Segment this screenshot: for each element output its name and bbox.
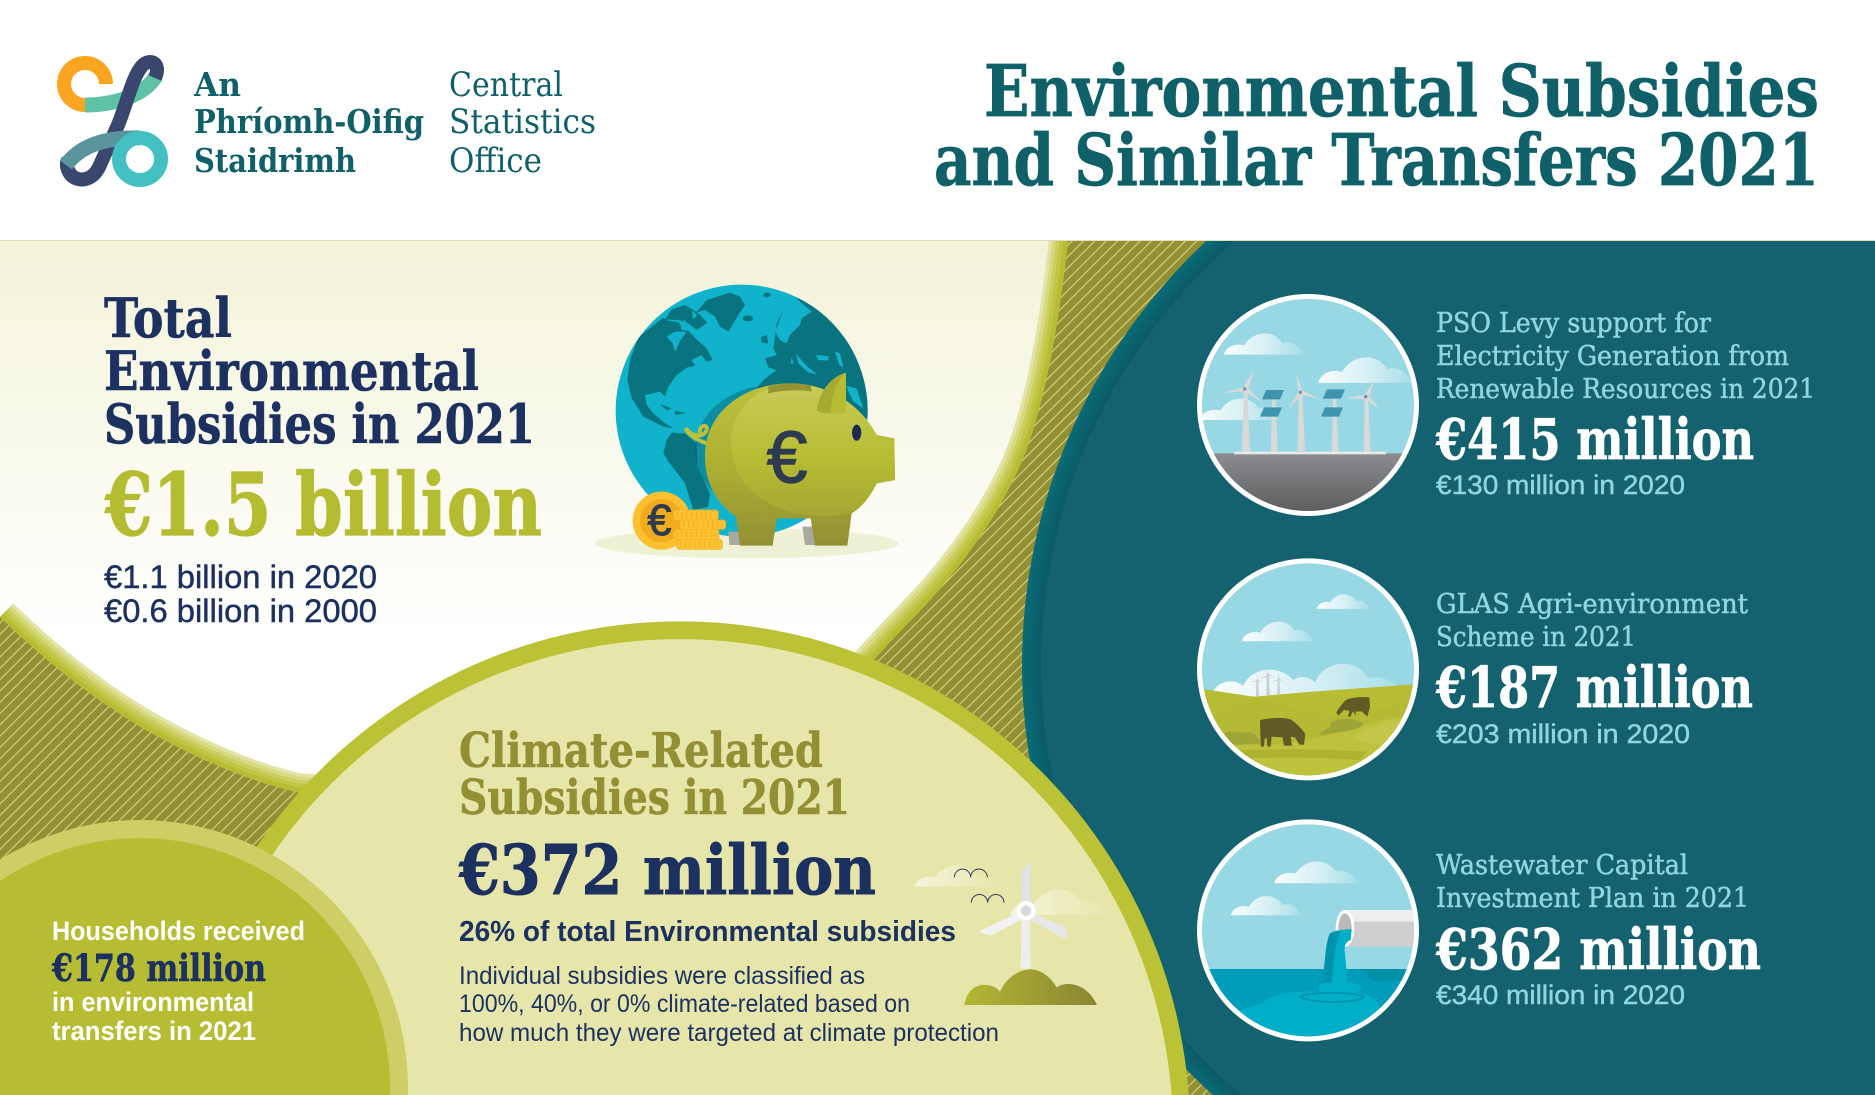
logo: CSO mark	[64, 62, 161, 180]
heading: total environmental subsidies: Subsidies in 2021	[104, 392, 535, 456]
back legs	[728, 527, 815, 545]
sub-heading: share of total: 26% of total Environmental subsidies	[459, 916, 956, 948]
text block: PSO levy: Electricity Generation from	[1436, 341, 1789, 372]
heading: total environmental subsidies: Environmental	[104, 339, 479, 403]
panel: total environmental subsidies background	[0, 240, 1068, 800]
illustration: farmland with cows	[1193, 558, 1427, 787]
cow	[1336, 697, 1370, 717]
cow	[1260, 718, 1305, 747]
heading: climate-related subsidies: Subsidies in 2021	[459, 770, 850, 826]
text block: GLAS	[1435, 589, 1753, 749]
coin stack	[673, 510, 726, 549]
logo text: Irish: An	[193, 65, 241, 104]
illustration: wind turbines and solar panels	[1193, 293, 1427, 520]
text block: classification note: how much they were targeted at climate protection	[459, 1019, 999, 1047]
big number: 372 million: €372 million	[458, 831, 876, 911]
background hatch	[0, 240, 1875, 1095]
pig tail	[686, 426, 707, 443]
text block: GLAS: Scheme in 2021	[1436, 622, 1636, 653]
pig body	[705, 383, 895, 546]
text block: households: €178 million	[51, 946, 266, 990]
text block: PSO levy: PSO Levy support for	[1436, 308, 1711, 339]
logo text: English: Office	[449, 141, 542, 181]
text block: GLAS: GLAS Agri-environment	[1436, 589, 1748, 620]
text block: wastewater: €340 million in 2020	[1436, 980, 1685, 1010]
heading: climate-related subsidies: Climate-Related	[459, 723, 823, 779]
text block: wastewater	[1435, 850, 1761, 1010]
text block: households: transfers in 2021	[52, 1016, 256, 1046]
icon: piggy bank and globe: €	[647, 497, 671, 545]
pig highlight	[731, 384, 895, 516]
coin	[633, 492, 691, 550]
title	[934, 49, 1819, 202]
logo text: English: Statistics	[449, 102, 596, 142]
icon: piggy bank and globe	[595, 285, 899, 558]
text block: PSO levy: €130 million in 2020	[1436, 470, 1685, 500]
text block: households: in environmental	[52, 987, 254, 1017]
logo text: Irish: Phríomh-Oifig	[194, 102, 424, 141]
text block: wastewater: Investment Plan in 2021	[1436, 883, 1749, 914]
text block: PSO levy: Renewable Resources in 2021	[1436, 374, 1815, 405]
panel: climate-related circle	[171, 621, 1189, 1095]
comparison: previous years: €1.1 billion in 2020	[104, 559, 377, 595]
text block: GLAS: €187 million	[1435, 655, 1753, 721]
illustration: wastewater pipe	[1193, 819, 1428, 1049]
logo text: Irish	[193, 65, 424, 180]
text block: households: Households received	[52, 916, 305, 946]
icon: wind turbine on hill	[915, 860, 1105, 1005]
text block: classification note: Individual subsidies were classified as	[459, 962, 865, 990]
text block: GLAS: €203 million in 2020	[1436, 719, 1690, 749]
text block: wastewater: €362 million	[1435, 917, 1761, 983]
text block: classification note	[459, 962, 999, 1047]
text block: households	[51, 916, 305, 1046]
logo text: Irish: Staidrimh	[194, 141, 356, 180]
big number: 1.5 billion: €1.5 billion	[104, 455, 542, 556]
text block: PSO levy: €415 million	[1435, 407, 1754, 473]
heading: total environmental subsidies: Total	[104, 286, 232, 350]
euro on pig: €	[767, 417, 807, 499]
text block: wastewater: Wastewater Capital	[1436, 850, 1688, 881]
heading: climate-related subsidies	[459, 723, 850, 826]
logo text: English	[449, 65, 596, 181]
header bar	[0, 0, 1875, 241]
panel: right teal background	[1022, 240, 1875, 1095]
heading: total environmental subsidies	[104, 286, 535, 456]
comparison: previous years: €0.6 billion in 2000	[104, 593, 377, 629]
text block: classification note: 100%, 40%, or 0% climate-related based on	[459, 990, 910, 1018]
text block: PSO levy	[1435, 308, 1815, 500]
logo text: English: Central	[449, 65, 563, 105]
comparison: previous years	[104, 559, 377, 629]
panel: households circle	[0, 820, 408, 1095]
